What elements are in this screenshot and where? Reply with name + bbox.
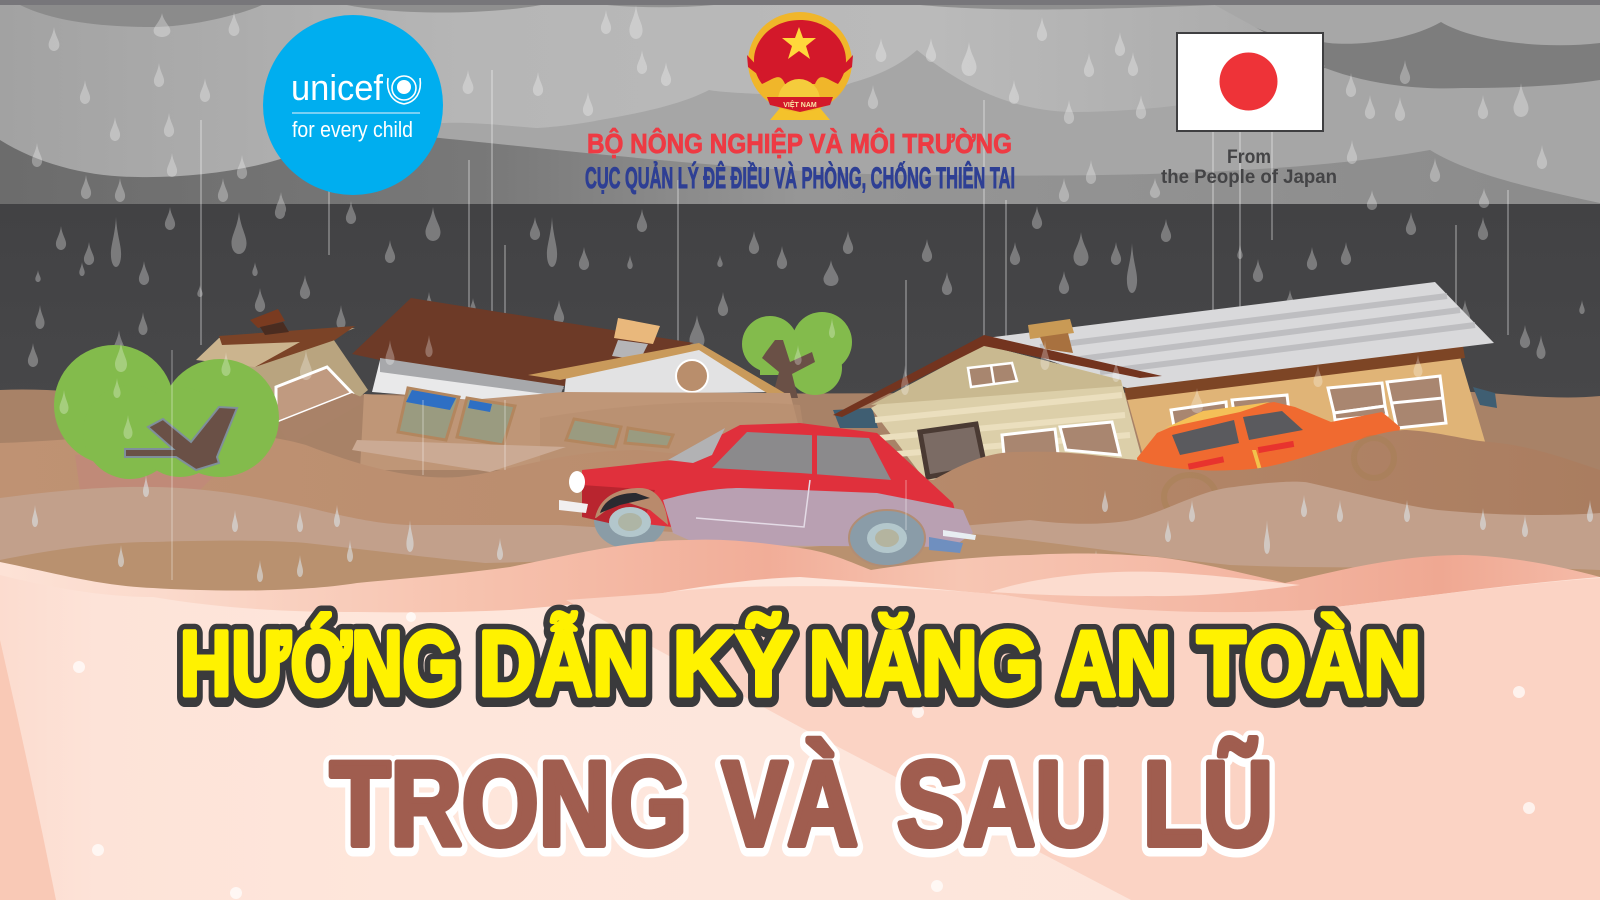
right house with grey roof	[986, 282, 1494, 480]
collapsed house left	[196, 309, 368, 445]
small cream gable house	[528, 318, 788, 395]
title line 2: LŨ	[1143, 739, 1273, 873]
title line 2: SAU	[897, 739, 1107, 873]
small right tree	[742, 312, 852, 398]
title line 1: AN	[1061, 615, 1171, 717]
dark stormy sky background	[0, 0, 1600, 440]
unicef logo: unicef	[291, 67, 384, 108]
title line 2: TRONG	[330, 737, 687, 871]
foreground white sparkles	[73, 612, 1535, 899]
title line 1: NĂNG	[809, 615, 1038, 717]
title line 2	[330, 737, 1273, 873]
title line 1: KỸ	[673, 613, 792, 715]
foreground light base	[0, 575, 1600, 900]
title line 1: TOÀN	[1197, 615, 1421, 717]
foreground light lobe	[990, 572, 1300, 596]
department name: CỤC QUẢN LÝ ĐÊ ĐIỀU VÀ PHÒNG, CHỐNG THIÊN TAI	[585, 161, 1015, 195]
title line 2: SAU	[897, 737, 1107, 871]
unicef globe emblem	[388, 76, 420, 104]
tree trunk	[125, 407, 237, 470]
title line 1: HƯỚNG	[180, 612, 458, 715]
from the people of Japan: the People of Japan	[1161, 167, 1337, 188]
title line 1: DẪN	[479, 614, 649, 717]
title line 2: VÀ	[722, 739, 858, 873]
title line 1: AN	[1061, 613, 1171, 715]
title line 1: KỸ	[673, 615, 792, 717]
title line 2: LŨ	[1143, 737, 1273, 871]
red car	[559, 423, 976, 566]
cream house front	[833, 319, 1162, 480]
small rain drops over water	[32, 475, 1593, 582]
title line 1: DẪN	[479, 612, 649, 715]
long rain streaks over water	[172, 350, 906, 580]
from the people of Japan	[1161, 147, 1337, 188]
Vietnam national emblem	[747, 12, 853, 120]
header cloud band	[0, 0, 1600, 204]
orange pickup truck	[1137, 402, 1400, 490]
vertical rain streaks	[201, 70, 1508, 500]
unicef logo	[263, 15, 443, 195]
submerged truck wheels	[1164, 438, 1394, 519]
Vietnam national emblem: VIỆT NAM	[783, 100, 817, 109]
title line 1: TOÀN	[1197, 613, 1421, 715]
flood wave middle	[0, 430, 1600, 600]
right house windows	[1171, 376, 1446, 432]
flooded windows	[398, 388, 673, 447]
title line 2: TRONG	[330, 739, 687, 873]
flood wave translucent	[0, 482, 1600, 620]
rain drops	[28, 5, 1585, 367]
foreground left stripe	[0, 640, 56, 900]
flooded front of houses	[352, 388, 810, 472]
pink foreground wave	[0, 540, 1600, 900]
title line 1: HƯỚNG	[180, 614, 458, 717]
unicef logo: for every child	[292, 117, 413, 142]
big brown roof house	[352, 298, 694, 405]
flood wave lower	[0, 533, 1600, 640]
flood water behind houses	[0, 389, 1600, 560]
title line 1	[180, 612, 1421, 717]
title line 1: NĂNG	[809, 613, 1038, 715]
wheels	[594, 491, 666, 549]
rain drops over tree and houses	[60, 318, 1422, 439]
big left tree	[54, 345, 279, 490]
title line 2: VÀ	[722, 737, 858, 871]
Japan flag	[1177, 33, 1323, 131]
deep water blue patches	[833, 387, 1497, 428]
foreground diagonal shade	[566, 578, 1600, 900]
ministry name: BỘ NÔNG NGHIỆP VÀ MÔI TRƯỜNG	[587, 127, 1012, 159]
from the people of Japan: From	[1227, 147, 1271, 168]
